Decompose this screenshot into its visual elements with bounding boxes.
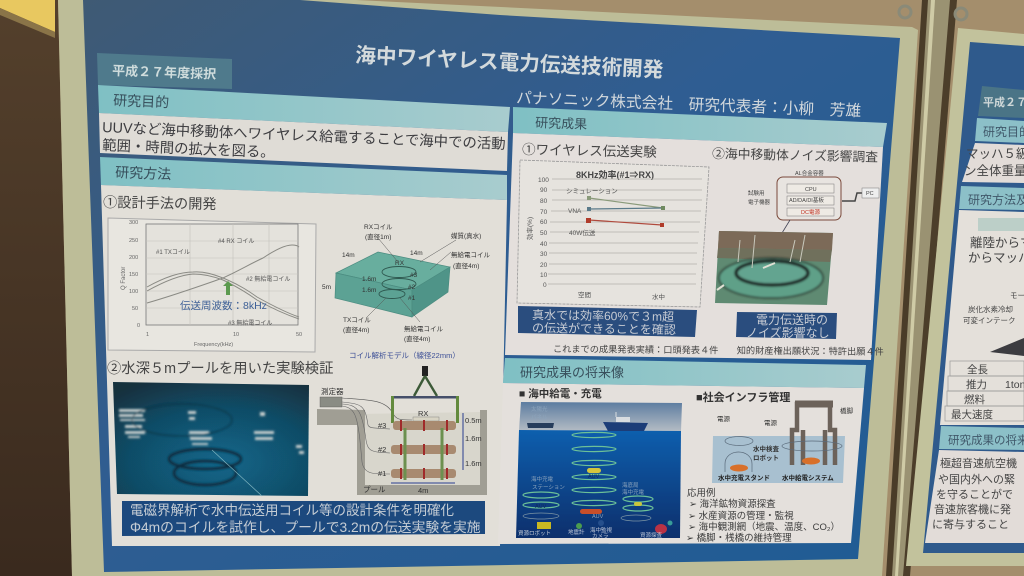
diagram: noise measurement block: PC	[866, 191, 874, 197]
diagram: coil analysis model: 14m	[342, 252, 355, 259]
diagram: coil analysis model: RXコイル	[364, 223, 393, 231]
illustration: undersea charging: パネル	[531, 414, 548, 421]
text: publication record: これまでの成果発表実績：口頭発表４件 知的財産権出願状況：特許出願４件	[553, 343, 884, 357]
heading: noise impact survey: ②海中移動体ノイズ影響調査	[712, 146, 878, 164]
chart: 8kHz efficiency: シミュレーション	[566, 188, 618, 195]
heading: design method: ①設計手法の開発	[103, 195, 217, 213]
illustration: infrastructure	[712, 404, 854, 483]
diagram: pool experiment setup: 測定器	[321, 386, 344, 396]
neighbouring poster: 燃料	[964, 393, 985, 406]
chart: 8kHz efficiency: 水中	[652, 292, 665, 301]
photo: pool experiment	[113, 382, 309, 496]
chart: 8kHz efficiency: 20	[540, 262, 548, 269]
chart: 8kHz efficiency: 70	[540, 209, 548, 216]
panel: future vision: 研究成果の将来像	[520, 365, 624, 380]
panel: research purpose: 範囲・時間の拡大を図る。	[102, 136, 275, 161]
chart: 8kHz efficiency: 効率(%)	[525, 217, 534, 240]
diagram: noise measurement block: 電子機器	[748, 198, 771, 206]
chart: Q factor vs frequency	[108, 218, 316, 352]
title: 海中ワイヤレス電力伝送技術開発	[355, 43, 664, 82]
illustration: undersea charging: 地震計	[568, 528, 585, 536]
chart: Q factor vs frequency: 100	[129, 289, 138, 295]
illustration: undersea charging: ステーション	[532, 484, 565, 491]
chart: 8kHz efficiency: 80	[540, 198, 548, 205]
panel: research results	[505, 107, 887, 360]
neighbouring poster: 全長	[967, 363, 988, 376]
neighbouring poster: や国内外への緊	[938, 472, 1015, 486]
callout: efficiency result: 真水では効率60%で３m超	[532, 307, 674, 324]
chart: 8kHz efficiency: 50	[540, 230, 548, 237]
chart: Q factor vs frequency: 250	[129, 238, 138, 244]
panel: research purpose: UUVなど海中移動体へワイヤレス給電することで海中での活動	[102, 119, 506, 153]
chart: 8kHz efficiency: 40	[540, 241, 548, 248]
diagram: pool experiment setup: RX	[418, 409, 428, 418]
chart: Q factor vs frequency: #1 TXコイル	[156, 249, 190, 256]
diagram: pool experiment setup: #2	[378, 445, 386, 454]
diagram: coil analysis model: 5m	[322, 284, 331, 291]
neighbouring poster: 可変インテーク	[963, 315, 1016, 325]
illustration: infrastructure: 水中給電システム	[782, 473, 834, 482]
diagram: noise measurement block: DC電源	[801, 208, 820, 216]
diagram: coil analysis model	[322, 223, 490, 360]
diagram: coil analysis model: #3	[410, 272, 418, 279]
panel: research method	[100, 157, 507, 546]
illustration: infrastructure: 電源	[717, 414, 730, 423]
chart: 8kHz efficiency: 40W伝送	[569, 228, 596, 237]
text: application examples: ➢ 橋脚・桟橋の維持管理	[686, 532, 792, 544]
chart: Q factor vs frequency: #2 無給電コイル	[246, 275, 290, 283]
chart: 8kHz efficiency: 30	[540, 251, 548, 258]
text: application examples: ➢ 水産資源の管理・監視	[688, 510, 794, 522]
chart: 8kHz efficiency: 90	[540, 187, 548, 194]
chart: 8kHz efficiency: VNA	[568, 208, 582, 215]
tag: adoption year: 平成２７年度採択	[112, 63, 216, 82]
chart: 8kHz efficiency: 0	[543, 282, 547, 289]
chart: Q factor vs frequency: 伝送周波数：8kHz	[180, 299, 267, 312]
diagram: coil analysis model: 1.6m	[362, 276, 376, 283]
chart: Q factor vs frequency: 1	[146, 332, 149, 338]
diagram: pool experiment setup: 1.6m	[465, 434, 482, 443]
diagram: coil analysis model: TXコイル	[343, 316, 371, 324]
heading: wireless transfer experiment: ①ワイヤレス伝送実験	[522, 142, 657, 160]
callout: noise result: ノイズ影響なし	[746, 325, 830, 340]
illustration: infrastructure: 水中充電スタンド	[718, 473, 770, 482]
callout: efficiency result	[518, 306, 697, 337]
chart: Q factor vs frequency: 10	[233, 332, 239, 338]
illustration: undersea charging: 海中監視	[590, 526, 613, 534]
neighbouring poster: 極超音速航空機	[940, 456, 1017, 470]
callout: method summary: Φ4mのコイルを試作し、プールで3.2mの伝送実験を実施	[130, 520, 481, 535]
chart: 8kHz efficiency: 60	[540, 219, 548, 226]
text: application examples: ➢ 海中観測網（地震、温度、CO₂）	[688, 521, 840, 533]
chart: 8kHz efficiency: 100	[538, 177, 549, 184]
text: application examples: 応用例	[687, 487, 716, 499]
diagram: coil analysis model: 媒質(真水)	[451, 231, 481, 240]
text: application examples: ➢ 海洋鉱物資源探査	[689, 498, 776, 510]
diagram: pool experiment setup	[317, 366, 487, 495]
diagram: noise measurement block: CPU	[805, 187, 817, 193]
chart: 8kHz efficiency	[517, 160, 709, 307]
neighbouring poster	[906, 28, 1024, 566]
diagram: pool experiment setup: 0.5m	[465, 416, 482, 425]
diagram: noise measurement block: AL合金容器	[795, 169, 824, 177]
heading: undersea power supply: ■ 海中給電・充電	[519, 387, 602, 400]
illustration: undersea charging: 海底局	[622, 481, 639, 489]
diagram: coil analysis model: #2	[408, 284, 416, 291]
chart: Q factor vs frequency: Frequency(kHz)	[194, 342, 233, 348]
neighbouring poster: 最大速度	[951, 408, 993, 421]
neighbouring poster: 音速旅客機に発	[934, 502, 1011, 516]
diagram: pool experiment setup: #3	[378, 421, 386, 430]
diagram: pool experiment setup: プール	[363, 485, 386, 494]
diagram: coil analysis model: 1.6m	[362, 287, 376, 294]
panel: research purpose	[98, 85, 510, 171]
illustration: undersea charging: 海中充電	[531, 475, 554, 483]
diagram: noise measurement block: AD/DA/DI基板	[789, 196, 824, 204]
diagram: noise measurement block: 試験用	[748, 189, 765, 197]
illustration: undersea charging: 資源ロボット	[518, 529, 551, 537]
diagram: coil analysis model: (直径1m)	[365, 232, 391, 241]
tag: adoption year	[97, 53, 232, 89]
callout: efficiency result: の伝送ができることを確認	[532, 320, 676, 337]
callout: noise result	[736, 312, 837, 340]
icon: poster hook left	[899, 6, 911, 18]
illustration: undersea charging: AUV	[535, 504, 547, 510]
illustration: undersea charging: 海中充電	[622, 488, 645, 496]
neighbouring poster: 推力	[966, 378, 987, 391]
neighbouring poster: を守ることがで	[936, 487, 1013, 501]
illustration: undersea charging	[516, 402, 682, 540]
photo: coil test tank	[715, 231, 833, 305]
chart: Q factor vs frequency: 300	[129, 220, 138, 226]
callout: method summary	[122, 501, 485, 536]
callout: method summary: 電磁界解析で水中伝送用コイル等の設計条件を明確化	[130, 502, 454, 518]
illustration: undersea charging: 資源探査	[640, 531, 663, 539]
illustration: undersea charging: カメラ	[592, 533, 609, 540]
chart: Q factor vs frequency: Q Factor	[121, 267, 127, 290]
chart: Q factor vs frequency: 150	[129, 272, 138, 278]
heading: pool verification: ②水深５mプールを用いた実験検証	[107, 360, 333, 377]
panel: research results: 研究成果	[535, 115, 587, 132]
diagram: coil analysis model: (直径4m)	[453, 261, 479, 270]
diagram: coil analysis model: RX	[395, 260, 405, 267]
organisation and lead researcher: パナソニック株式会社 研究代表者：小柳 芳雄	[516, 89, 862, 120]
chart: Q factor vs frequency: 200	[129, 255, 138, 261]
chart: 8kHz efficiency: 8KHz効率(#1⇒RX)	[576, 169, 654, 180]
diagram: coil analysis model: 無給電コイル	[451, 250, 490, 259]
illustration: undersea charging: AUV	[592, 514, 604, 520]
chart: 8kHz efficiency: 10	[540, 272, 548, 279]
panel: future vision	[498, 358, 866, 544]
illustration: infrastructure: 電源	[764, 418, 778, 427]
callout: noise result: 電力伝送時の	[756, 312, 828, 327]
diagram: coil analysis model: (直径4m)	[343, 325, 369, 334]
diagram: coil analysis model: 無給電コイル	[404, 324, 444, 333]
chart: 8kHz efficiency: 空間	[578, 291, 591, 299]
diagram: coil analysis model: 14m	[410, 250, 423, 257]
icon: poster hook right	[955, 8, 967, 20]
text: application examples	[686, 487, 840, 544]
chart: Q factor vs frequency: 50	[132, 306, 138, 312]
illustration: infrastructure: 橋脚	[840, 406, 854, 415]
chart: Q factor vs frequency: #3 無給電コイル	[228, 319, 272, 327]
neighbouring poster: に寄与すること	[932, 518, 1009, 531]
illustration: infrastructure: 水中検査	[753, 444, 780, 453]
illustration: undersea charging: 太陽光	[531, 405, 548, 413]
diagram: coil analysis model: (直径4m)	[404, 334, 430, 343]
diagram: pool experiment setup: 1.6m	[465, 459, 482, 468]
heading: social infrastructure management: ■社会インフラ管理	[696, 390, 790, 404]
diagram: coil analysis model: コイル解析モデル（線径22mm）	[349, 350, 460, 360]
diagram: noise measurement block	[748, 169, 879, 233]
illustration: infrastructure: ロボット	[753, 453, 779, 462]
neighbouring poster: 炭化水素冷却	[968, 304, 1013, 314]
diagram: coil analysis model: #1	[408, 295, 416, 302]
diagram: pool experiment setup: #1	[378, 469, 386, 478]
illustration: undersea charging: AUV	[588, 474, 600, 480]
chart: Q factor vs frequency: 50	[296, 332, 302, 338]
panel: research method: 研究方法	[115, 164, 171, 182]
diagram: pool experiment setup: 4m	[418, 486, 428, 495]
chart: Q factor vs frequency: #4 RX コイル	[218, 238, 254, 245]
panel: research purpose: 研究目的	[113, 92, 169, 110]
main poster blue board	[83, 0, 900, 572]
chart: Q factor vs frequency: 0	[137, 323, 140, 329]
